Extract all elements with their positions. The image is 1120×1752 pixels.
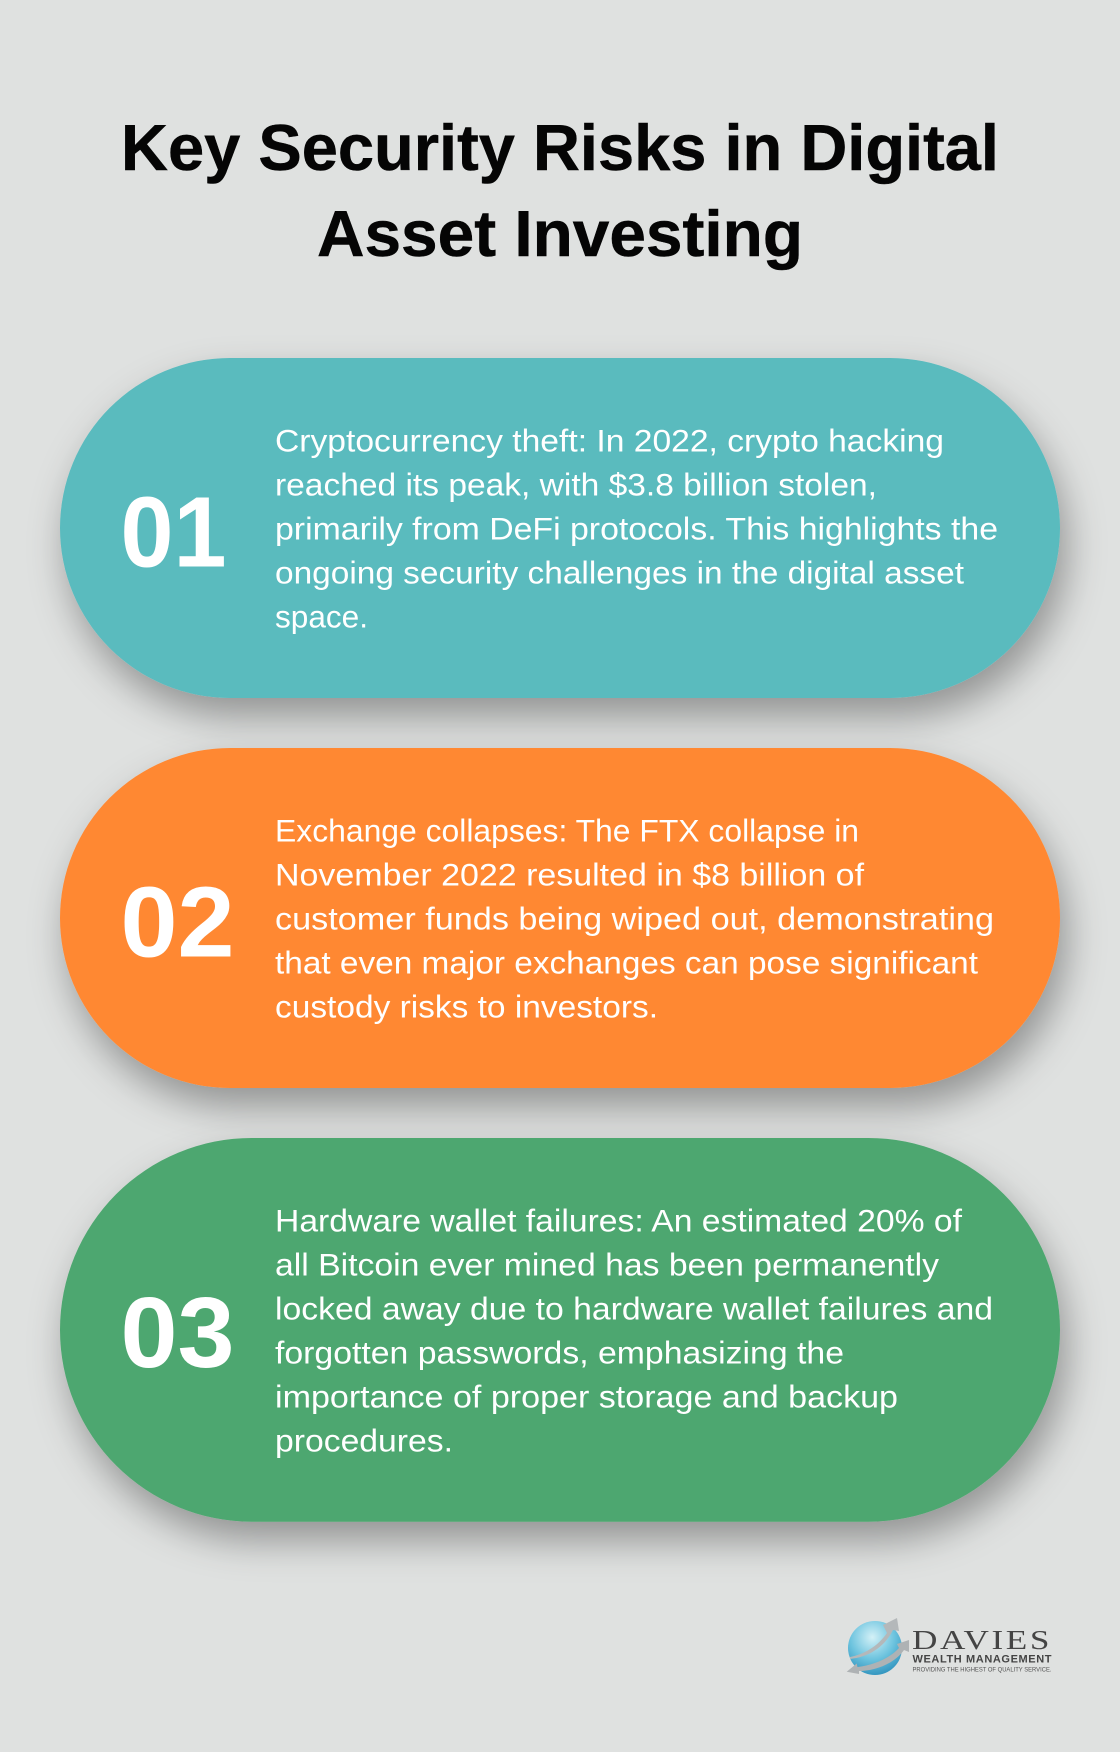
text: hardware wallet failures: procedures. [275,1423,453,1459]
text: cryptocurrency theft [275,423,998,635]
panel: hardware wallet failures [60,1138,1060,1522]
title [121,111,999,270]
title: Asset Investing [317,197,803,270]
text: exchange collapses: customer funds being wiped out, demonstrating [275,901,994,937]
text: hardware wallet failures: forgotten passwords, emphasizing the [275,1335,844,1371]
text: cryptocurrency theft: Cryptocurrency theft: In 2022, crypto hacking [275,423,944,459]
text: exchange collapses: November 2022 resulted in $8 billion of [275,857,864,893]
text: cryptocurrency theft: primarily from DeFi protocols. This highlights the [275,511,998,547]
text: hardware wallet failures: all Bitcoin ever mined has been permanently [275,1247,939,1283]
text: exchange collapses [275,813,994,1025]
text: exchange collapses: Exchange collapses: The FTX collapse in [275,813,859,849]
panel: exchange collapses [60,748,1060,1088]
number 02: 02 [120,867,234,979]
text: cryptocurrency theft: ongoing security challenges in the digital asset [275,555,964,591]
tagline: wealth management: WEALTH MANAGEMENT [912,1654,1052,1666]
text: cryptocurrency theft: space. [275,599,368,635]
text: exchange collapses: custody risks to investors. [275,989,658,1025]
logo: Davies Wealth Management [847,1618,1052,1675]
text: hardware wallet failures: locked away due to hardware wallet failures and [275,1291,993,1327]
title: Key Security Risks in Digital [121,111,999,184]
number 01: 01 [120,477,226,589]
text: exchange collapses: that even major exchanges can pose significant [275,945,978,981]
panel: cryptocurrency theft [60,358,1060,698]
number 03: 03 [120,1277,234,1389]
icon: globe with arrows [847,1618,909,1675]
tagline: providing: PROVIDING THE HIGHEST OF QUALITY SERVICE. [912,1666,1052,1674]
text: hardware wallet failures: Hardware wallet failures: An estimated 20% of [275,1203,962,1239]
text: hardware wallet failures [275,1203,993,1459]
text: hardware wallet failures: importance of proper storage and backup [275,1379,898,1415]
text: cryptocurrency theft: reached its peak, with $3.8 billion stolen, [275,467,877,503]
wordmark: DAVIES [912,1625,1052,1655]
